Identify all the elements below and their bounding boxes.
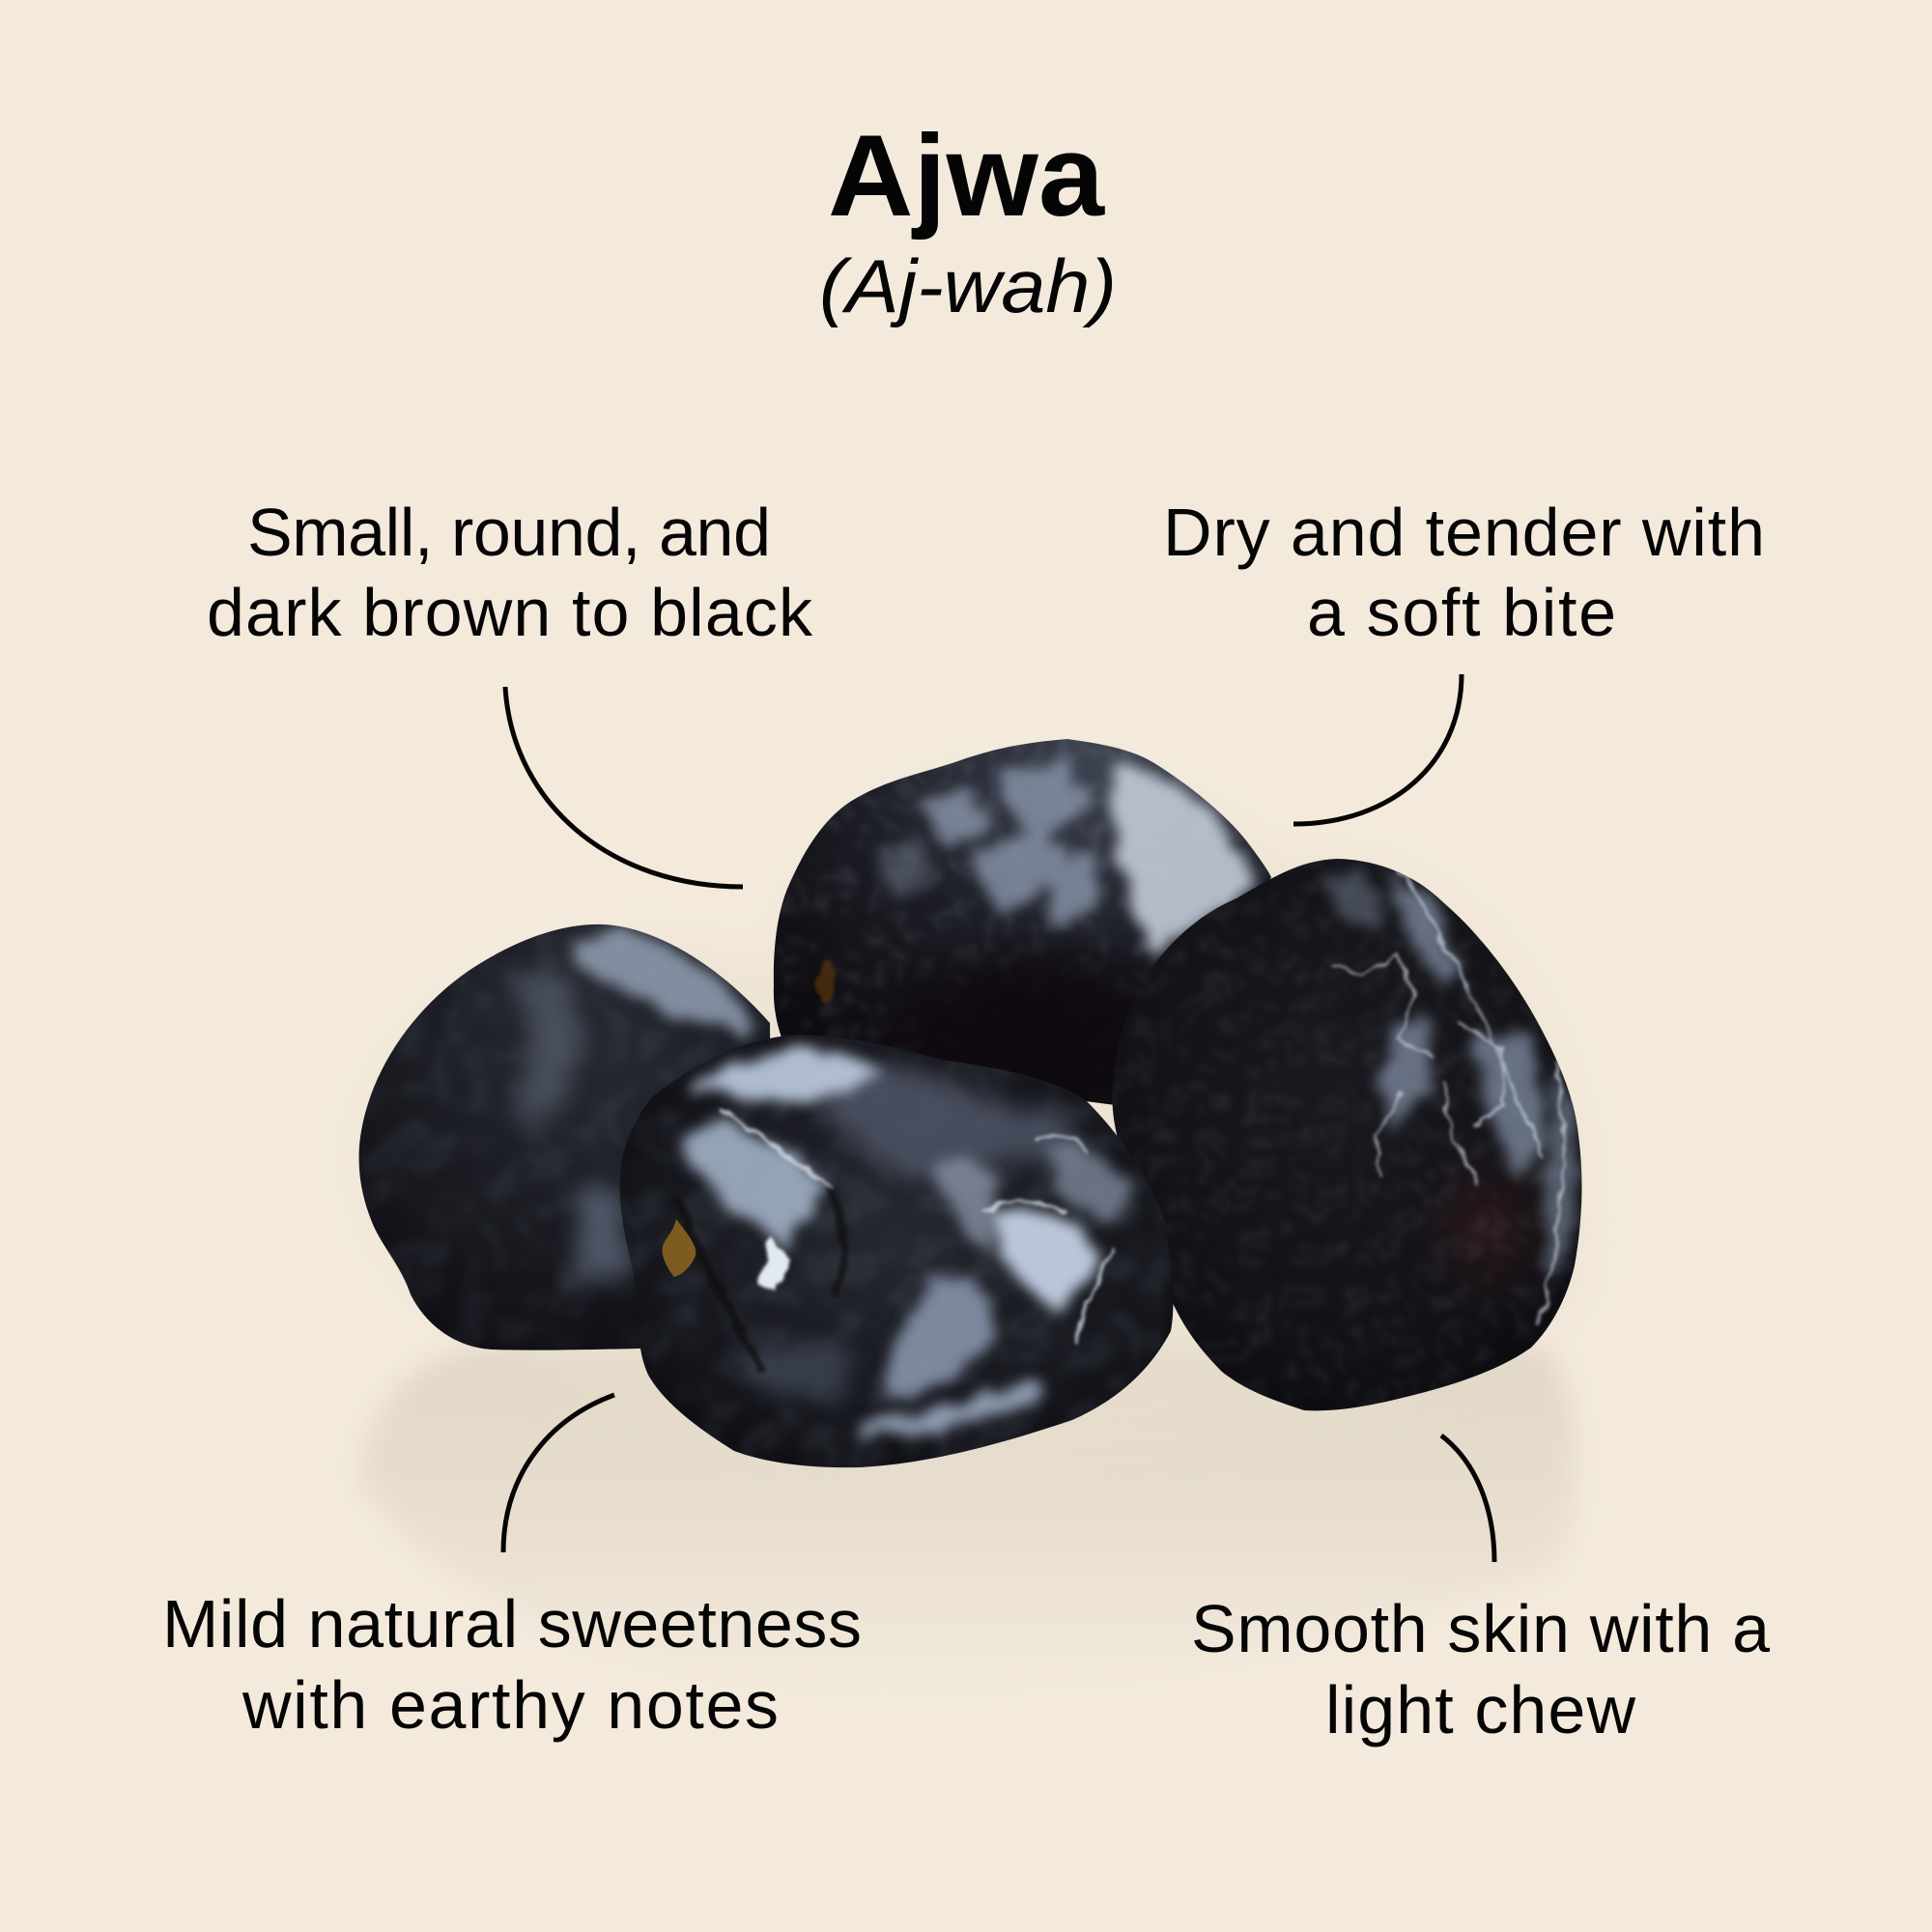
callout: Smooth skin with a light chew xyxy=(1191,1591,1770,1747)
date: back xyxy=(773,739,1271,1105)
lower highlight: left date xyxy=(570,1183,628,1285)
bright silver highlight: back date xyxy=(1111,763,1256,952)
lower shadow: back date xyxy=(896,941,1146,1102)
reddish glow: right date xyxy=(1447,1180,1531,1275)
callout: Smooth skin with a light chew: light chew xyxy=(1325,1672,1635,1747)
date: right xyxy=(1101,850,1594,1420)
texture: front date xyxy=(613,1024,1183,1478)
arrow: bottom-left connector xyxy=(503,1395,614,1552)
subtitle: pronunciation: (Aj-wah) xyxy=(819,243,1117,328)
dark crease: front date xyxy=(676,1190,843,1372)
highlight: front upper right xyxy=(1043,1140,1135,1227)
arrow: top-right connector xyxy=(1293,674,1462,824)
dim facet: front lower left xyxy=(739,1346,850,1401)
highlight: front left facet xyxy=(688,1121,826,1251)
date: front xyxy=(613,1024,1183,1478)
callout: Mild natural sweetness with earthy notes xyxy=(162,1586,862,1743)
highlight: front small bright xyxy=(761,1236,790,1293)
highlight: front middle xyxy=(932,1154,1000,1251)
top highlight: left date xyxy=(570,924,758,1036)
arrow: bottom-right connector xyxy=(1441,1435,1494,1562)
soft halo around the dates xyxy=(359,770,1586,1468)
grey top sheen: front date xyxy=(792,1072,1082,1183)
crease lines: front date xyxy=(720,1109,1116,1343)
texture: right date xyxy=(1119,861,1580,1406)
brown stem scar: back date xyxy=(816,959,836,1002)
crease lines: right date xyxy=(1333,869,1565,1323)
callout: Dry and tender with a soft bite: a soft bite xyxy=(1307,575,1616,650)
texture: back date xyxy=(777,739,1264,1049)
title: Ajwa xyxy=(828,111,1105,241)
callout: Mild natural sweetness with earthy notes: with earthy notes xyxy=(242,1667,779,1743)
shine patches: right date xyxy=(1323,869,1577,1275)
arrow: top-left connector xyxy=(505,687,743,887)
callout: Small, round, and dark brown to black xyxy=(207,495,813,650)
callout: Small, round, and dark brown to black: dark brown to black xyxy=(207,575,813,650)
centre highlight: left date xyxy=(512,971,580,1121)
callout: Dry and tender with a soft bite: Dry and tender with xyxy=(1163,495,1765,570)
highlight: front lower band xyxy=(855,1379,1038,1441)
highlight: front right facet xyxy=(995,1212,1101,1314)
brown stem scar: front date xyxy=(663,1219,696,1277)
highlights: front date xyxy=(688,1048,1135,1441)
mottled highlight: back date xyxy=(869,763,1101,927)
reflection of the dates xyxy=(359,1345,1576,1700)
date: left xyxy=(348,913,782,1357)
callout: Small, round, and dark brown to black: Small, round, and xyxy=(247,495,771,570)
callout: Smooth skin with a light chew: Smooth skin with a xyxy=(1191,1591,1770,1666)
highlight: front centre xyxy=(884,1275,1000,1401)
highlight: front top-left xyxy=(691,1048,884,1101)
callout: Dry and tender with a soft bite xyxy=(1163,495,1765,650)
callout: Mild natural sweetness with earthy notes: Mild natural sweetness xyxy=(162,1586,862,1662)
texture: left date xyxy=(362,924,763,1347)
